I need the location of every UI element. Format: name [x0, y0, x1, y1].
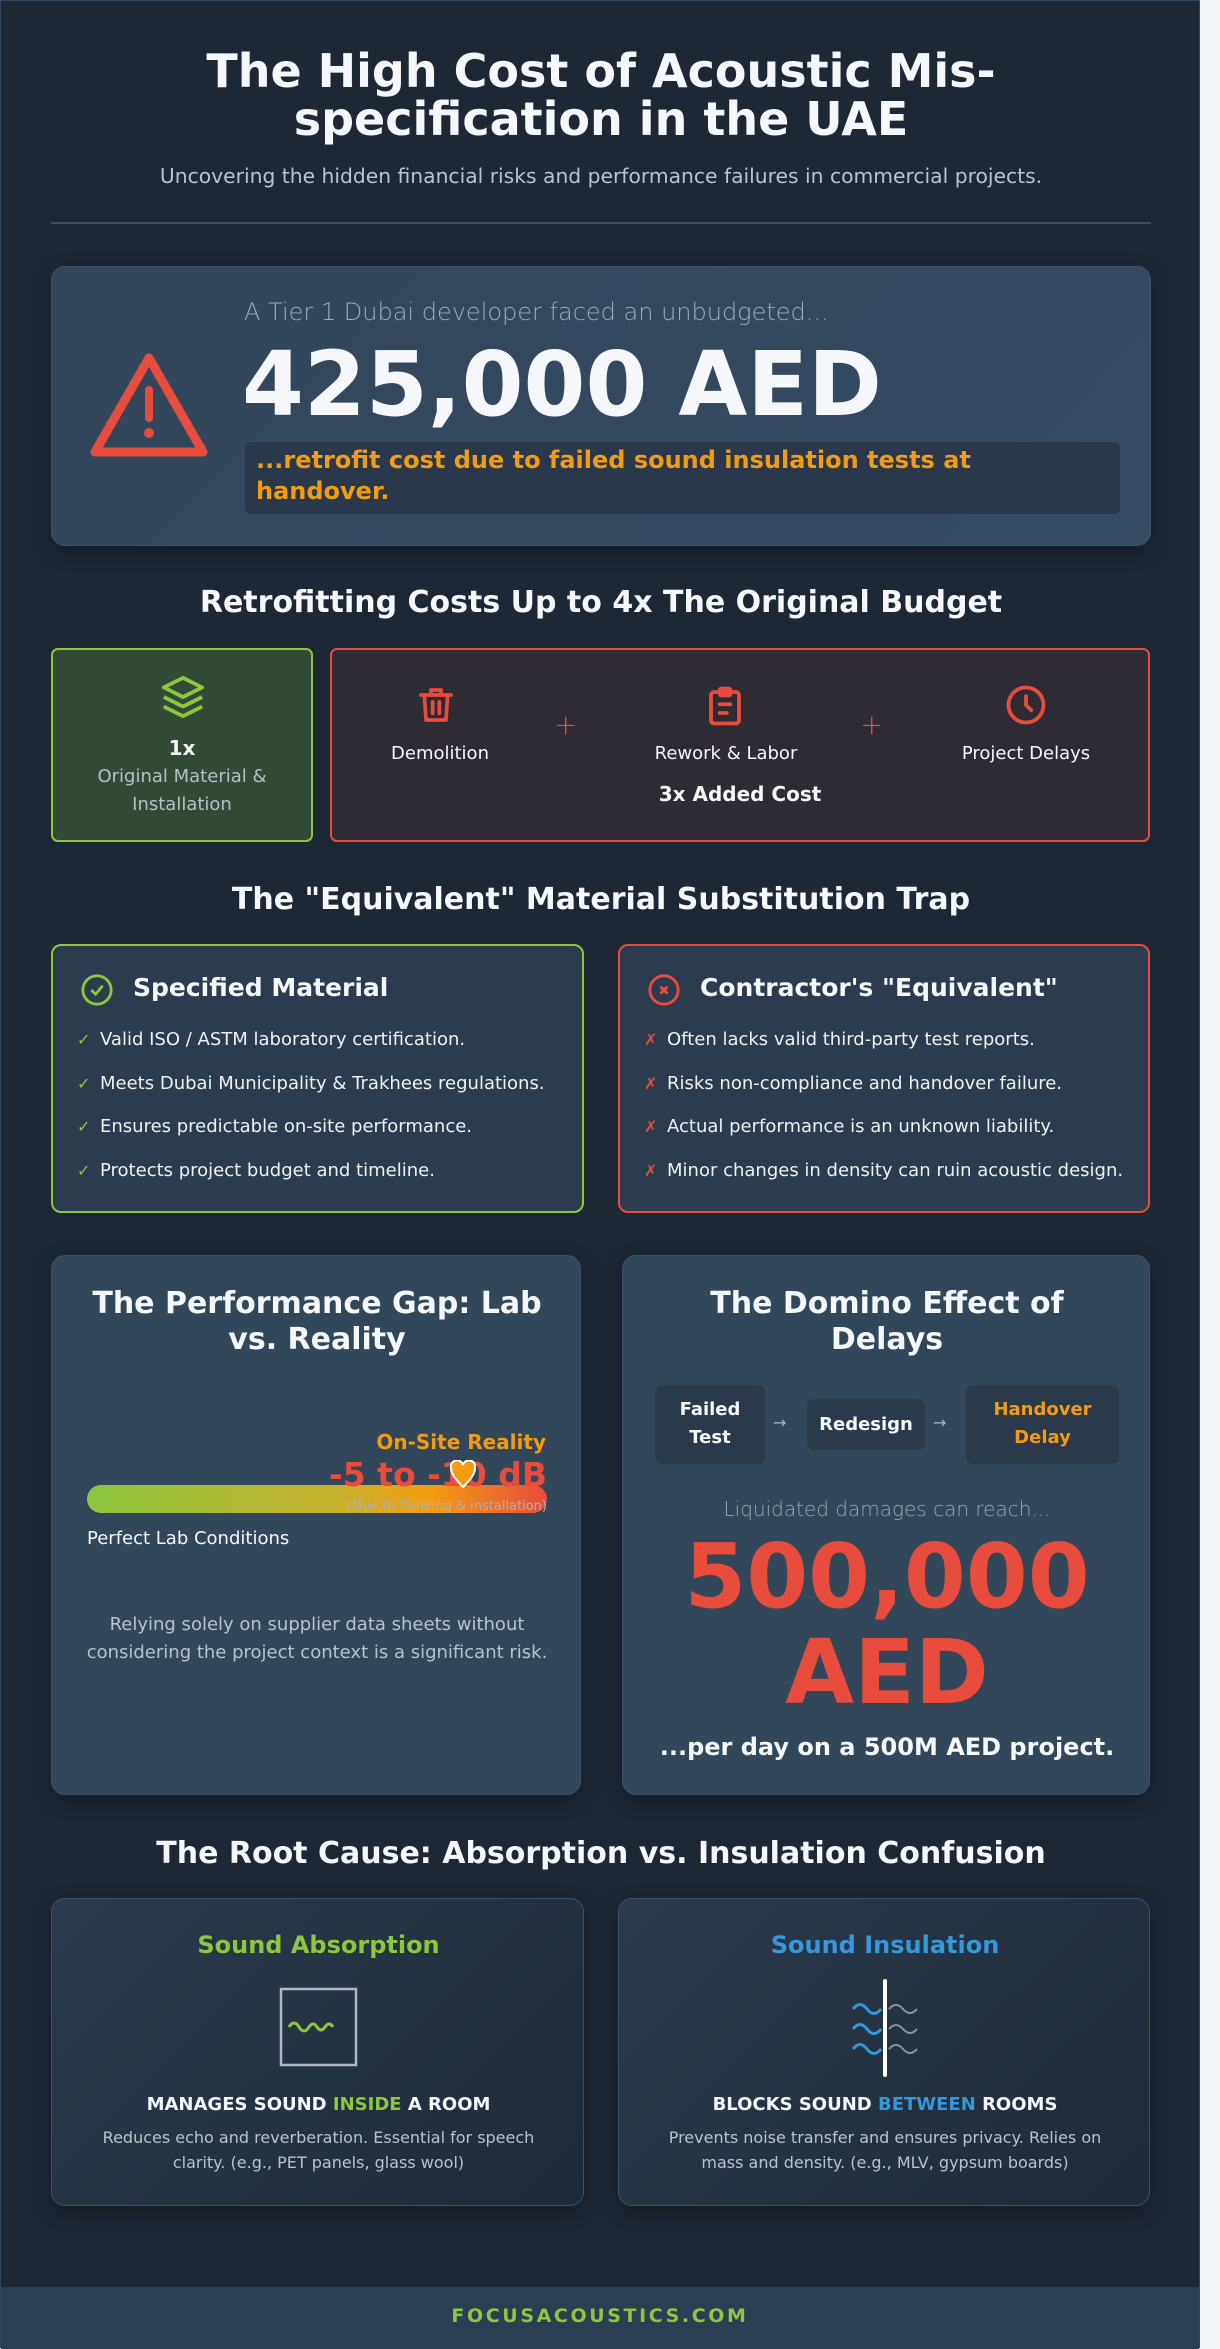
panel: sound absorption: MANAGES SOUND INSIDE A ROOM — [147, 2094, 490, 2115]
heading: root cause: The Root Cause: Absorption vs. Insulation Confusion — [156, 1836, 1046, 1871]
panel: domino effect: Liquidated damages can reach... — [724, 1497, 1050, 1521]
panel: contractor equivalent: ✗ — [644, 1030, 657, 1049]
panel: 1x original: Installation — [132, 794, 232, 815]
footer — [1, 2287, 1199, 2349]
heading: substitution trap: The "Equivalent" Material Substitution Trap — [232, 882, 970, 917]
panel: sound absorption: Reduces echo and reverberation. Essential for speech clarity. (e.g., PET panels, glass wool) — [103, 2128, 534, 2172]
text: big number — [684, 1524, 1090, 1724]
text: big number: 500,000 — [684, 1524, 1090, 1628]
callout — [245, 442, 1120, 514]
chart: gradient bar — [87, 1485, 547, 1513]
text: big number: 425,000 AED — [242, 332, 882, 436]
panel: specified material: ✓ — [77, 1161, 90, 1180]
panel: 3x added cost: Rework & Labor — [655, 743, 797, 764]
panel: 3x added cost: + — [554, 708, 577, 741]
panel: 3x added cost — [330, 648, 1150, 842]
panel: specified material: Protects project budget and timeline. — [100, 1160, 435, 1181]
panel: contractor equivalent: ✗ — [644, 1074, 657, 1093]
icon: warning triangle — [90, 354, 208, 456]
flow: redesign — [807, 1399, 925, 1450]
panel: performance gap — [51, 1255, 581, 1795]
subtitle: Uncovering the hidden financial risks and performance failures in commercial projects. — [160, 164, 1042, 188]
panel: contractor equivalent: Risks non-compliance and handover failure. — [667, 1073, 1062, 1094]
panel: performance gap: On-Site Reality — [376, 1430, 546, 1454]
text: big number: AED — [785, 1620, 989, 1724]
flow: failed test: Test — [689, 1427, 731, 1448]
panel: performance gap: The Performance Gap: Lab vs. Reality — [92, 1286, 542, 1357]
panel: specified material: ✓ — [77, 1117, 90, 1136]
icon: clipboard — [709, 686, 741, 726]
icon: x circle — [648, 974, 680, 1006]
panel: specified material: ✓ — [77, 1030, 90, 1049]
panel: sound absorption — [51, 1898, 584, 2206]
callout: ...retrofit cost due to failed sound insulation tests at handover. — [256, 446, 971, 505]
panel: contractor equivalent: Contractor's "Equivalent" — [700, 973, 1058, 1002]
panel: contractor equivalent: Minor changes in density can ruin acoustic design. — [667, 1160, 1123, 1181]
icon: marker — [450, 1460, 476, 1488]
heading: retrofitting: Retrofitting Costs Up to 4x The Original Budget — [200, 585, 1002, 620]
panel: 3x added cost: 3x Added Cost — [659, 782, 821, 806]
panel: sound insulation: BLOCKS SOUND BETWEEN ROOMS — [713, 2094, 1057, 2115]
panel: domino effect: The Domino Effect of Delays — [710, 1286, 1064, 1357]
panel: hero stat — [51, 266, 1151, 546]
panel: contractor equivalent: Actual performance is an unknown liability. — [667, 1116, 1054, 1137]
panel: contractor equivalent: ✗ — [644, 1161, 657, 1180]
panel: specified material: Valid ISO / ASTM laboratory certification. — [100, 1029, 465, 1050]
icon: check circle — [81, 974, 113, 1006]
flow: failed test: Failed — [680, 1399, 740, 1420]
panel: 1x original — [51, 648, 313, 842]
panel: domino effect: → — [933, 1413, 946, 1432]
panel: domino effect: ...per day on a 500M AED project. — [660, 1733, 1114, 1761]
panel: specified material: Specified Material — [133, 973, 388, 1002]
panel: performance gap: Perfect Lab Conditions — [87, 1528, 289, 1549]
icon: layers — [162, 676, 204, 718]
text: lead-in: A Tier 1 Dubai developer faced an unbudgeted... — [244, 298, 829, 326]
panel: 3x added cost: Demolition — [391, 743, 489, 764]
flow: redesign: Redesign — [819, 1414, 913, 1435]
panel: specified material: ✓ — [77, 1074, 90, 1093]
flow: failed test — [655, 1385, 765, 1464]
panel: contractor equivalent — [618, 944, 1150, 1213]
flow: handover delay — [966, 1385, 1119, 1464]
panel: specified material: Meets Dubai Municipality & Trakhees regulations. — [100, 1073, 545, 1094]
icon: absorption panel — [280, 1988, 358, 2066]
title — [206, 44, 996, 146]
footer: FOCUSACOUSTICS.COM — [451, 2305, 749, 2327]
icon: wall blocking waves — [852, 1979, 918, 2077]
icon: trash — [419, 688, 453, 722]
panel: performance gap: (Due to flanking & installation) — [347, 1499, 547, 1514]
panel: specified material — [51, 944, 584, 1213]
panel: 3x added cost: + — [860, 708, 883, 741]
title: The High Cost of Acoustic Mis- — [206, 44, 996, 98]
panel: contractor equivalent: ✗ — [644, 1117, 657, 1136]
panel: sound insulation — [618, 1898, 1150, 2206]
flow: handover delay: Handover — [993, 1399, 1092, 1420]
flow: handover delay: Delay — [1014, 1427, 1071, 1448]
panel: 3x added cost: Project Delays — [962, 743, 1090, 764]
panel: performance gap: Relying solely on supplier data sheets without considering the project context is a significant risk. — [87, 1614, 547, 1663]
panel: specified material: Ensures predictable on-site performance. — [100, 1116, 472, 1137]
title: specification in the UAE — [294, 92, 908, 146]
panel: domino effect: → — [773, 1413, 786, 1432]
panel: 1x original: 1x — [169, 736, 195, 760]
icon: clock — [1006, 686, 1046, 724]
panel: contractor equivalent: Often lacks valid third-party test reports. — [667, 1029, 1035, 1050]
panel: sound insulation: Sound Insulation — [771, 1931, 999, 1959]
panel: 1x original: Original Material & — [97, 766, 267, 787]
panel: sound insulation: Prevents noise transfer and ensures privacy. Relies on mass and density. (e.g., MLV, gypsum boards) — [669, 2128, 1101, 2172]
panel: performance gap: -5 to -10 dB — [329, 1455, 547, 1494]
panel: domino effect — [622, 1255, 1150, 1795]
panel: sound absorption: Sound Absorption — [197, 1931, 440, 1959]
